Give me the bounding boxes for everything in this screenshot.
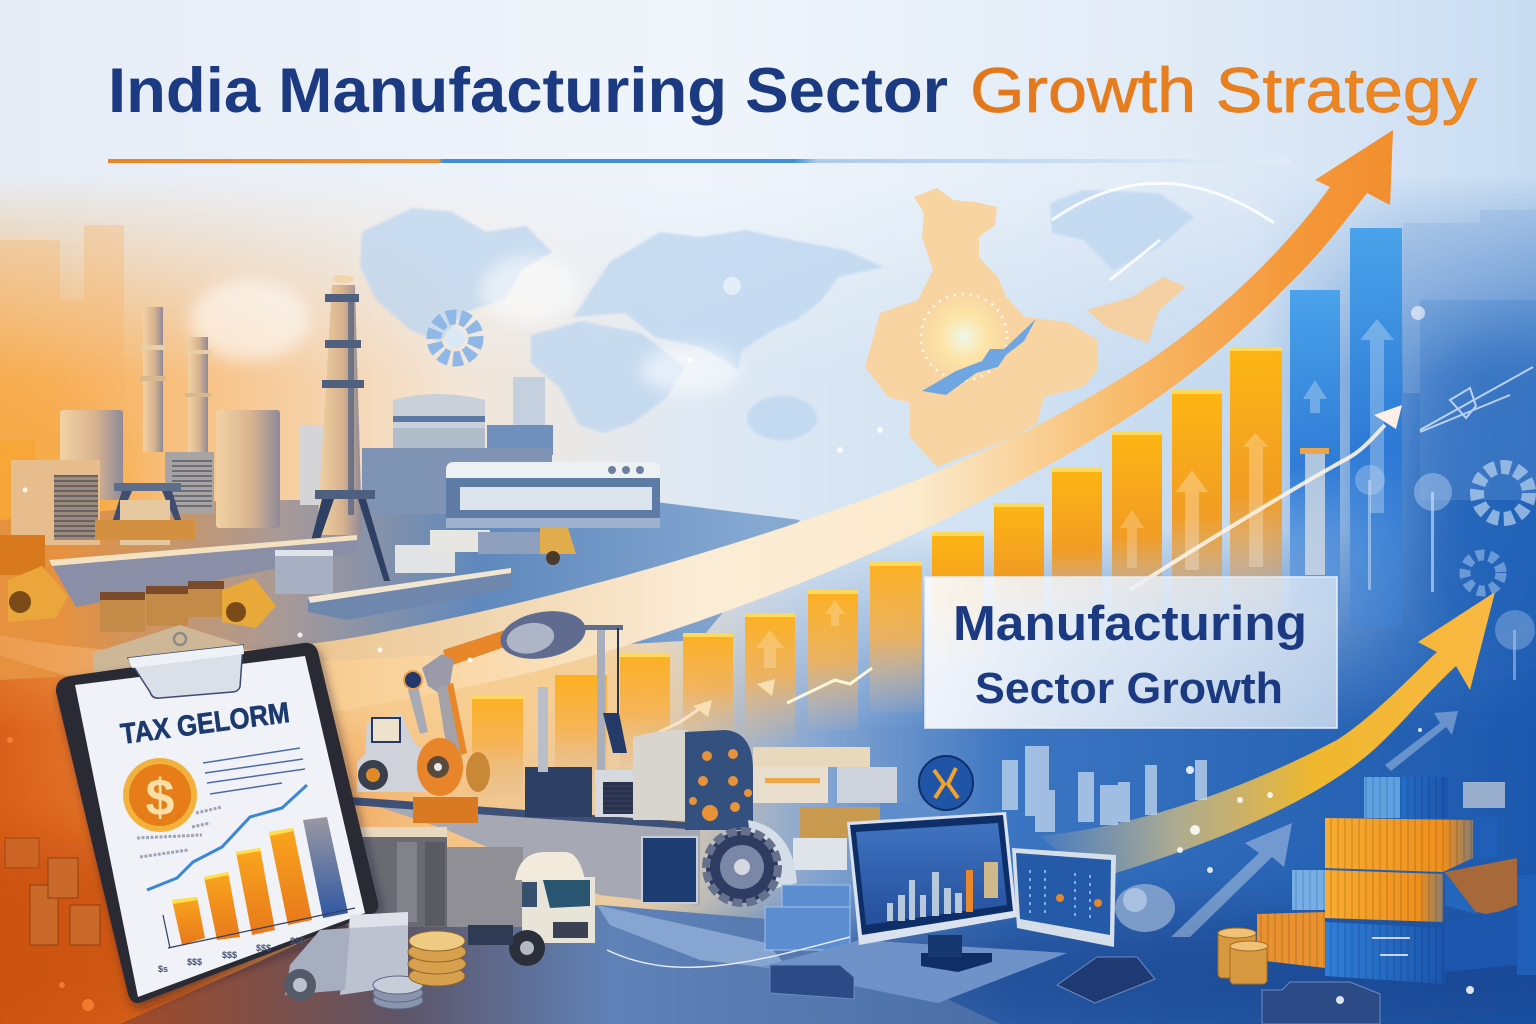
- orange container: [1325, 818, 1473, 872]
- crates: [100, 581, 224, 632]
- conveyor machine: [350, 730, 797, 905]
- chimneys: [143, 307, 163, 452]
- blue container right: [1445, 875, 1536, 975]
- callout text: Sector Growth: [975, 664, 1283, 713]
- clipboard board: [56, 643, 378, 1003]
- map gear: [434, 317, 476, 359]
- blue container behind: [1473, 817, 1497, 857]
- left city backdrop: [0, 225, 124, 470]
- badge: [919, 756, 973, 810]
- blue container bottom: [1325, 922, 1445, 984]
- white map clouds: [190, 256, 740, 394]
- paper: [75, 656, 365, 997]
- orange container two: [1325, 870, 1443, 922]
- clipboard heading: TAX GELORM: [119, 697, 291, 751]
- clipboard backing: [93, 625, 243, 700]
- grey truck: [284, 912, 408, 1001]
- tablet: [1012, 848, 1116, 947]
- computer keyboard desk: [760, 940, 1067, 1003]
- clipboard bars: [172, 817, 348, 945]
- left building: [11, 460, 100, 545]
- blue trend line: [147, 785, 307, 890]
- orange sparks: [7, 737, 94, 1011]
- stacked boxes: [753, 747, 973, 870]
- clipboard: [56, 625, 378, 1003]
- engine part: [1115, 884, 1175, 932]
- lower gold arrow: [1040, 592, 1495, 880]
- long shed: [446, 462, 660, 518]
- coin stack: [408, 931, 466, 986]
- vent unit: [1463, 782, 1505, 808]
- bar chart: [472, 228, 1402, 743]
- axis labels: $$$: [222, 950, 237, 960]
- route arcs: [1052, 183, 1274, 280]
- title: India Manufacturing Sector: [108, 56, 948, 126]
- small orange container: [1257, 912, 1325, 968]
- india map: [865, 188, 1186, 467]
- yellow vehicles: [8, 566, 68, 622]
- blue machine: [685, 730, 753, 830]
- title: Growth Strategy: [970, 56, 1478, 126]
- icon: dollar coin: $: [146, 769, 175, 827]
- left stacks: [5, 838, 100, 945]
- main growth arrow: [0, 130, 1393, 712]
- axis labels: $$$: [290, 936, 305, 946]
- tall tower: [317, 285, 362, 535]
- cargo truck: [360, 827, 595, 966]
- axis labels: $$$: [256, 943, 271, 953]
- callout text: [953, 597, 1307, 713]
- blue wedge: [1445, 872, 1478, 915]
- bar arrows: [756, 319, 1394, 668]
- white trend arrow: [633, 405, 1402, 745]
- title underline: [108, 159, 1290, 163]
- doorway: [642, 837, 697, 903]
- ground plane: [0, 500, 800, 680]
- right city backdrop: [1403, 210, 1536, 500]
- top blue container: [1364, 777, 1448, 818]
- conveyors: [49, 535, 357, 607]
- axis labels: [158, 936, 305, 974]
- skyline: [1002, 746, 1207, 832]
- background bars: [472, 653, 670, 795]
- tire stack: [373, 976, 423, 1009]
- text lines: [203, 748, 305, 794]
- title: [108, 56, 1478, 126]
- sparkles: [22, 277, 1474, 1004]
- coins: [1218, 928, 1268, 984]
- platform: [114, 483, 181, 491]
- gear wheel: [706, 831, 778, 903]
- icon: dollar coin: [123, 758, 197, 832]
- callout text: Manufacturing: [953, 597, 1307, 651]
- tanks: [60, 410, 123, 500]
- clip: [128, 633, 244, 698]
- blue crates: [765, 885, 850, 950]
- small vehicle: [357, 714, 427, 792]
- brown container: [1445, 858, 1517, 915]
- pavement: [597, 905, 790, 970]
- axis labels: $$$: [187, 957, 202, 967]
- world map backdrop: [360, 190, 1194, 440]
- robot arm: [357, 605, 627, 823]
- back cylinder and buildings: [513, 377, 545, 432]
- containers: [1218, 777, 1536, 984]
- factory complex: [0, 275, 800, 680]
- right side icons: [1171, 367, 1535, 937]
- light blue container: [1292, 870, 1325, 910]
- axis labels: $s: [158, 964, 168, 974]
- bottom vehicles: [770, 957, 1380, 1024]
- monitor: [847, 812, 1017, 972]
- white cable: [607, 937, 850, 967]
- floor: [120, 905, 1000, 1024]
- callout: manufacturing sector growth: [925, 577, 1337, 728]
